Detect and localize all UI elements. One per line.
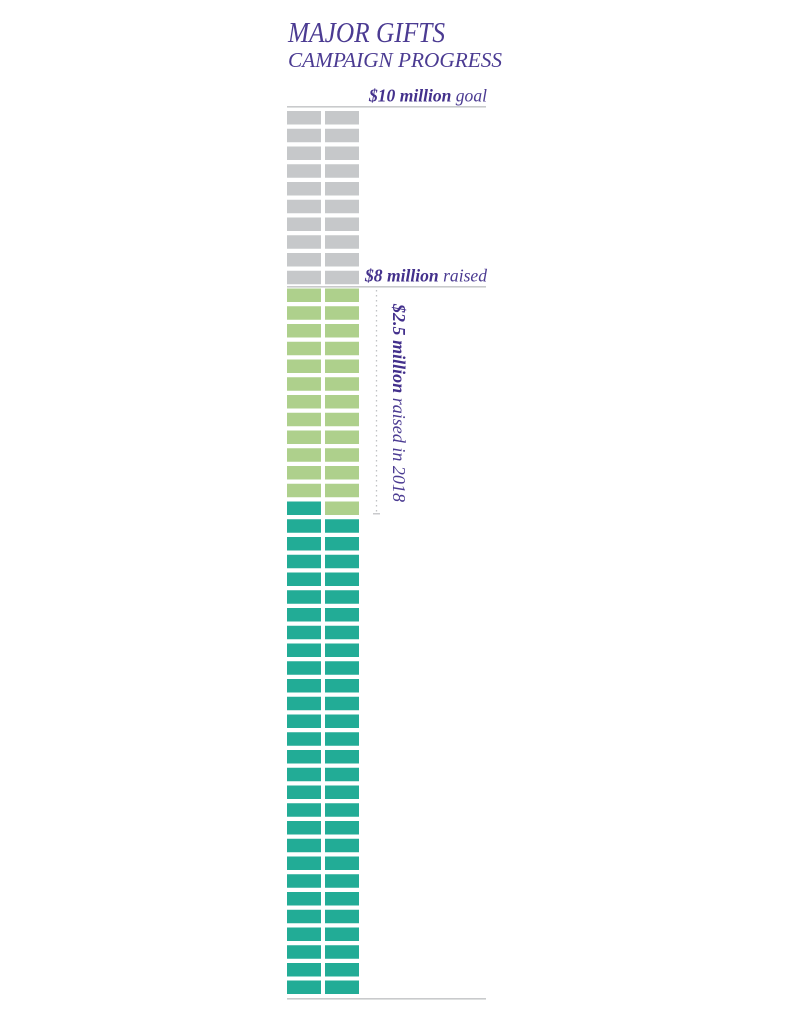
title: CAMPAIGN PROGRESS [288,48,502,72]
bars: raised in 2018 (light green) [287,288,359,515]
baseline [287,998,486,1000]
raised line [287,286,486,288]
label: $8 million raised: $8 million raised [364,266,487,286]
bars: raised before 2018 (teal) [287,502,359,994]
bars: remaining to goal (gray) [287,111,359,284]
title: MAJOR GIFTS [287,18,445,49]
label: $10 million goal: $10 million goal [368,86,487,106]
title [287,18,502,72]
label: $2.5 million raised in 2018 (rotated): $2.5 million raised in 2018 [389,303,409,502]
goal line [287,106,486,108]
dotted bracket for 2018 amount [373,290,380,514]
